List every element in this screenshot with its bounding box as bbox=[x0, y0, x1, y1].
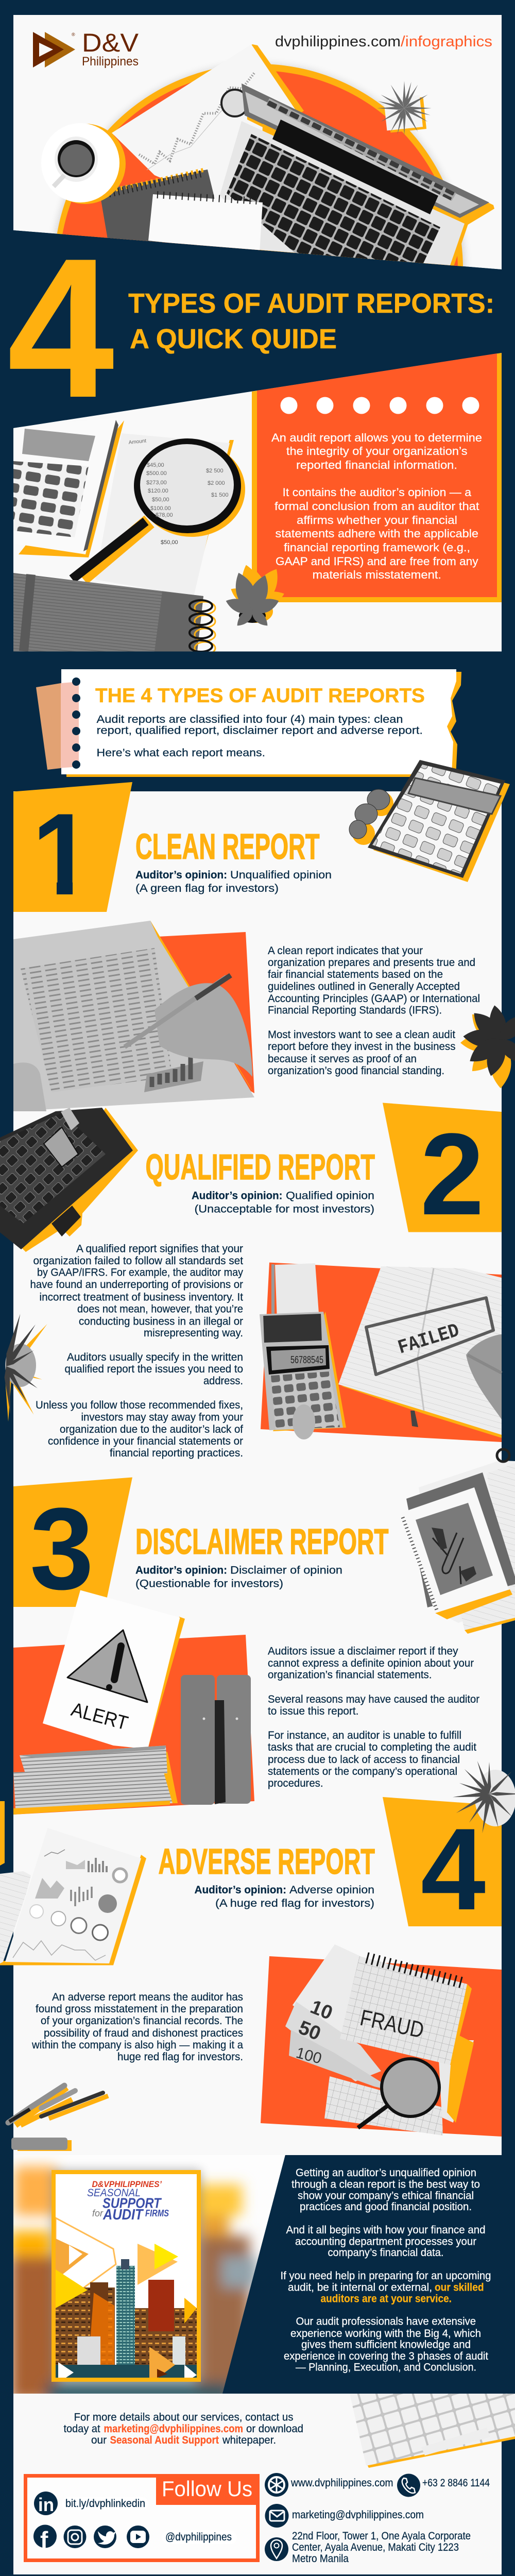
intro text: statements adhere with the applicable bbox=[275, 527, 478, 540]
auditor's opinion bbox=[195, 1884, 374, 1909]
text block: address. bbox=[203, 1375, 243, 1387]
closing text: auditors are at your service. bbox=[320, 2293, 452, 2305]
auditor's opinion bbox=[135, 869, 332, 894]
magnifier bbox=[358, 2059, 439, 2128]
notebook with failed stamp: FAILED bbox=[396, 1320, 462, 1359]
auditor's opinion: Auditor’s opinion: bbox=[192, 1190, 282, 1201]
contact text bbox=[64, 2411, 303, 2446]
big number 4: 4 bbox=[7, 217, 115, 439]
address bbox=[292, 2530, 471, 2565]
intro text: An audit report allows you to determine bbox=[271, 431, 482, 444]
cover title: for bbox=[92, 2208, 104, 2218]
number block 1: 1 bbox=[32, 789, 93, 919]
text block: within the company is also high — making it a bbox=[31, 2039, 243, 2051]
contact text: whitepaper. bbox=[222, 2434, 276, 2446]
icon: pens bbox=[8, 2086, 108, 2125]
fraud note: FRAUD bbox=[358, 2005, 426, 2043]
image: paper, calculator, magnifier and notebook bbox=[13, 418, 245, 654]
closing text: If you need help in preparing for an upcoming bbox=[280, 2270, 491, 2282]
shadow under circle bbox=[53, 62, 468, 267]
website: www.dvphilippines.com bbox=[290, 2477, 393, 2489]
linkedin bbox=[34, 2492, 148, 2515]
text block: by GAAP/IFRS. For example, the auditor may bbox=[37, 1266, 243, 1279]
closing text: audit, be it internal or external, bbox=[288, 2281, 432, 2294]
closing text: And it all begins with how your finance and bbox=[286, 2224, 485, 2236]
tape bbox=[36, 682, 79, 770]
magnifier: $45,00 bbox=[147, 462, 164, 468]
text block: of your organization’s financial records. The bbox=[41, 2015, 243, 2027]
title: TYPES OF AUDIT REPORTS: bbox=[128, 288, 494, 319]
text block: process due to lack of access to financial bbox=[268, 1754, 460, 1766]
cover title: FIRMS bbox=[145, 2208, 169, 2218]
notebook with failed stamp bbox=[338, 1266, 502, 1438]
closing text: Our audit professionals have extensive bbox=[296, 2315, 476, 2328]
closing text: show your company’s ethical financial bbox=[298, 2190, 474, 2202]
auditor's opinion: Auditor’s opinion: bbox=[135, 869, 227, 881]
closing text: — Planning, Execution, and Conclusion. bbox=[296, 2362, 476, 2373]
text block: Auditors usually specify in the written bbox=[67, 1351, 243, 1363]
lower pad bbox=[324, 2032, 474, 2136]
icon: instagram bbox=[64, 2526, 87, 2548]
follow us box bbox=[26, 2474, 260, 2561]
contact text: Seasonal Audit Support bbox=[110, 2434, 219, 2446]
closing text: through a clean report is the best way to bbox=[291, 2178, 480, 2191]
magnifier: $1 500 bbox=[211, 492, 229, 498]
magnifier: $50,00 bbox=[152, 497, 169, 503]
text block bbox=[31, 1991, 243, 2063]
text block: fair financial statements based on the bbox=[268, 969, 443, 980]
image: calculator and failed stamp bbox=[260, 1262, 502, 1442]
intro text bbox=[271, 431, 482, 581]
text block: An adverse report means the auditor has bbox=[52, 1991, 243, 2003]
paper sheet: Amount bbox=[128, 438, 147, 446]
text block: found gross misstatement in the preparation bbox=[36, 2003, 243, 2015]
text block: statements or the company’s operational bbox=[268, 1766, 457, 1777]
text block: Auditors issue a disclaimer report if they bbox=[268, 1646, 458, 1657]
cover artwork bbox=[56, 2218, 197, 2383]
intro text: materials misstatement. bbox=[312, 568, 441, 581]
notebook and notepad bbox=[99, 170, 263, 252]
auditor's opinion: (Questionable for investors) bbox=[135, 1578, 283, 1590]
plant in pot bbox=[377, 81, 432, 135]
text block: Most investors want to see a clean audit bbox=[268, 1029, 455, 1041]
website url: dvphilippines.com bbox=[275, 33, 401, 50]
address: 22nd Floor, Tower 1, One Ayala Corporate bbox=[292, 2530, 471, 2542]
image: printed charts page bbox=[0, 1828, 146, 1965]
icon: mail bbox=[265, 2504, 288, 2528]
auditor's opinion bbox=[135, 1564, 342, 1590]
website url bbox=[275, 33, 492, 50]
heading: QUALIFIED REPORT bbox=[145, 1147, 375, 1187]
icon: youtube bbox=[127, 2526, 149, 2548]
icon: phone bbox=[397, 2474, 420, 2497]
euro bills: 50 bbox=[296, 2016, 324, 2045]
contact text: For more details about our services, contact us bbox=[74, 2411, 294, 2424]
panel: white report body bbox=[13, 791, 502, 2155]
icon: aloe plant bbox=[3, 1313, 50, 1421]
auditor's opinion: (Unacceptable for most investors) bbox=[195, 1204, 374, 1215]
magnifier: $273,00 bbox=[146, 480, 167, 486]
icon: succulent bbox=[460, 1004, 515, 1088]
intro text: GAAP and IFRS) and are free from any bbox=[276, 555, 478, 568]
magnifier bbox=[72, 438, 245, 579]
closing text bbox=[280, 2167, 491, 2373]
alert page: ALERT bbox=[69, 1699, 130, 1735]
text block: report, qualified report, disclaimer report and adverse report. bbox=[97, 724, 423, 737]
text block: organization’s good financial standing. bbox=[268, 1065, 444, 1077]
binder rings bbox=[72, 677, 80, 769]
number block 3: 3 bbox=[30, 1483, 94, 1614]
text block: organization due to the auditor’s lack of bbox=[60, 1423, 243, 1435]
logo bbox=[33, 28, 139, 69]
panel: closing image and text bbox=[13, 2155, 490, 2394]
laptop bbox=[220, 83, 494, 273]
logo wordmark: D&V bbox=[82, 28, 139, 57]
text block: tasks that are crucial to completing the audit bbox=[268, 1741, 476, 1753]
number block 3 bbox=[13, 1478, 132, 1614]
text block: possibility of fraud and dishonest practices bbox=[44, 2027, 243, 2039]
number block 1 bbox=[13, 782, 132, 919]
contact text: marketing@dvphilippines.com bbox=[104, 2423, 243, 2435]
note paper with torn edge bbox=[61, 669, 461, 777]
heading: DISCLAIMER REPORT bbox=[135, 1521, 388, 1562]
panel: hero header bbox=[13, 15, 502, 269]
magnifier: $78,00 bbox=[156, 512, 173, 518]
closing text: practices and good financial position. bbox=[300, 2201, 472, 2213]
icon: calculator and coins bbox=[349, 760, 510, 882]
text block: does not mean, however, that you’re bbox=[77, 1303, 243, 1315]
text block: organization’s financial statements. bbox=[268, 1669, 432, 1681]
auditor's opinion: Qualified opinion bbox=[286, 1190, 374, 1201]
text block: report before they invest in the business bbox=[268, 1041, 455, 1053]
auditor's opinion: (A green flag for investors) bbox=[135, 883, 279, 894]
panel: report 3 disclaimer bbox=[13, 1449, 515, 1815]
euro bills: 100 bbox=[294, 2044, 323, 2067]
magnifier: $2 000 bbox=[208, 480, 225, 486]
intro text: affirms whether your financial bbox=[297, 514, 457, 527]
orange text box bbox=[252, 353, 502, 602]
panel: report 4 adverse bbox=[0, 1760, 515, 2151]
icon: keyboard bbox=[350, 2394, 515, 2468]
file stacks bbox=[13, 1745, 178, 1815]
icon: calculator in dark wallet bbox=[0, 1108, 138, 1252]
text block: Several reasons may have caused the auditor bbox=[268, 1693, 479, 1705]
text block: Unless you follow those recommended fixes, bbox=[36, 1399, 243, 1411]
navy text panel bbox=[222, 2155, 515, 2394]
heading: CLEAN REPORT bbox=[135, 826, 319, 867]
panel: intro bbox=[13, 353, 502, 654]
email: marketing@dvphilippines.com bbox=[292, 2509, 424, 2521]
text block bbox=[97, 714, 423, 759]
website url: /infographics bbox=[401, 33, 492, 50]
auditor's opinion: Disclaimer of opinion bbox=[230, 1564, 342, 1577]
dots bbox=[280, 397, 479, 414]
auditor's opinion: (A huge red flag for investors) bbox=[215, 1897, 374, 1909]
text block: have found an underreporting of provisions or bbox=[30, 1279, 243, 1291]
auditor's opinion: Auditor’s opinion: bbox=[195, 1884, 286, 1896]
text block: Here’s what each report means. bbox=[97, 747, 265, 759]
wooden notebook bbox=[13, 573, 215, 654]
text block: guidelines outlined in Generally Accepted bbox=[268, 981, 460, 992]
contact text: or download bbox=[246, 2423, 303, 2435]
icon: facebook: f bbox=[40, 2527, 48, 2553]
auditor's opinion: Auditor’s opinion: bbox=[135, 1564, 227, 1577]
image: alert sign, files and binders bbox=[13, 1590, 254, 1815]
text block bbox=[30, 1243, 243, 1459]
cover title: AUDIT bbox=[102, 2207, 144, 2223]
text block: organization failed to follow all standards set bbox=[33, 1255, 243, 1267]
icon: globe bbox=[265, 2473, 288, 2497]
cover title: SUPPORT bbox=[102, 2195, 162, 2211]
text block: because it serves as proof of an bbox=[268, 1053, 417, 1065]
linkedin: in bbox=[38, 2494, 54, 2515]
magnifier: $500.00 bbox=[146, 470, 167, 477]
fraud note bbox=[340, 1956, 472, 2065]
alert page bbox=[43, 1590, 185, 1749]
text block: to issue this report. bbox=[268, 1705, 358, 1717]
text block: investors may stay away from your bbox=[81, 1412, 243, 1423]
magnifier: $100.00 bbox=[150, 505, 171, 512]
heading: ADVERSE REPORT bbox=[159, 1841, 375, 1882]
cover title bbox=[87, 2179, 169, 2223]
euro bills bbox=[285, 1944, 397, 2092]
coffee cup bbox=[52, 124, 126, 204]
icon: facebook bbox=[33, 2524, 57, 2553]
panel: footer bbox=[13, 2394, 515, 2574]
calculator bbox=[13, 418, 124, 557]
logo wordmark: Philippines bbox=[82, 55, 139, 69]
contact text: today at bbox=[64, 2423, 100, 2435]
printing calculator: 56788545 bbox=[290, 1354, 323, 1366]
icon: mint plant bbox=[224, 563, 286, 629]
intro text: the integrity of your organization’s bbox=[286, 445, 468, 457]
intro text: reported financial information. bbox=[296, 459, 457, 471]
text block: Accounting Principles (GAAP) or International bbox=[268, 993, 480, 1005]
chart paper bbox=[112, 44, 304, 206]
closing text: Getting an auditor’s unqualified opinion bbox=[296, 2167, 476, 2179]
number block 4: 4 bbox=[421, 1804, 486, 1934]
text block: confidence in your financial statements or bbox=[48, 1435, 243, 1447]
title bbox=[128, 288, 494, 354]
text block: A qualified report signifies that your bbox=[76, 1243, 243, 1255]
closing text: our skilled bbox=[435, 2281, 484, 2294]
whitepaper cover bbox=[52, 2170, 201, 2383]
auditor's opinion: Adverse opinion bbox=[289, 1884, 374, 1896]
text block bbox=[268, 1646, 479, 1789]
address: Center, Ayala Avenue, Makati City 1223 bbox=[292, 2541, 459, 2553]
magnifier behind laptop bbox=[221, 90, 248, 116]
auditor's opinion: Unqualified opinion bbox=[230, 869, 332, 881]
number block 2 bbox=[383, 1103, 502, 1239]
text block: financial reporting practices. bbox=[110, 1447, 243, 1459]
printing calculator bbox=[260, 1263, 346, 1439]
panel: report 2 qualified bbox=[0, 1103, 502, 1459]
text block: huge red flag for investors. bbox=[117, 2051, 243, 2063]
icon: spiky plant bbox=[453, 1760, 515, 1834]
magnifier: $2 500 bbox=[206, 468, 224, 474]
follow us tab: Follow Us bbox=[162, 2477, 252, 2501]
paper sheet: $50,00 bbox=[161, 539, 178, 546]
auditor's opinion bbox=[192, 1190, 374, 1215]
paper sheet bbox=[95, 433, 234, 597]
intro text: financial reporting framework (e.g., bbox=[284, 541, 470, 554]
icon: logo arrows bbox=[33, 32, 75, 67]
number block 2: 2 bbox=[420, 1109, 484, 1239]
icon: twitter bbox=[94, 2526, 116, 2548]
text block: organization prepares and presents true and bbox=[268, 957, 475, 969]
text block: qualified report the issues you need to bbox=[65, 1363, 243, 1375]
phone number: +63 2 8846 1144 bbox=[422, 2477, 490, 2489]
text block: For instance, an auditor is unable to fulfill bbox=[268, 1730, 461, 1741]
text block: Audit reports are classified into four (4) main types: clean bbox=[97, 714, 403, 725]
icon: marker bbox=[11, 2138, 72, 2151]
logo wordmark: ® bbox=[72, 32, 75, 37]
address: Metro Manila bbox=[292, 2553, 349, 2565]
closing text: company’s financial data. bbox=[328, 2247, 444, 2259]
binders bbox=[181, 1675, 251, 1805]
heading: THE 4 TYPES OF AUDIT REPORTS bbox=[95, 685, 425, 707]
text block bbox=[268, 945, 480, 1077]
accent on left edge bbox=[0, 1801, 5, 1866]
number block 4 bbox=[383, 1797, 502, 1934]
closing text: accounting department processes your bbox=[295, 2236, 476, 2247]
text block: procedures. bbox=[268, 1777, 323, 1789]
text block: Financial Reporting Standards (IFRS). bbox=[268, 1005, 442, 1016]
yellow and orange circle bbox=[57, 64, 463, 266]
cover title: D&VPHILIPPINES’ bbox=[92, 2179, 162, 2189]
text block: conducting business in an illegal or bbox=[79, 1316, 243, 1327]
closing text: gives them sufficient knowledge and bbox=[301, 2339, 471, 2350]
closing text: experience in covering the 3 phases of audit bbox=[284, 2350, 488, 2362]
panel: report 1 clean bbox=[13, 760, 515, 1111]
logo wordmark bbox=[72, 28, 139, 69]
social handle: @dvphilippines bbox=[165, 2531, 232, 2543]
text block: incorrect treatment of business inventory. It bbox=[39, 1291, 243, 1303]
linkedin: bit.ly/dvphlinkedin bbox=[65, 2498, 145, 2510]
image: report with hand and pen bbox=[13, 921, 254, 1111]
magnifier: $120.00 bbox=[148, 488, 168, 494]
blurred city background bbox=[10, 2155, 285, 2406]
text block: A clean report indicates that your bbox=[268, 945, 423, 957]
closing text: experience working with the Big 4, which bbox=[290, 2328, 481, 2340]
intro text: formal conclusion from an auditor that bbox=[274, 500, 479, 513]
contact text: our bbox=[91, 2434, 107, 2446]
image: clipboard with notebook bbox=[401, 1449, 515, 1634]
contact details bbox=[265, 2473, 490, 2565]
text block: misrepresenting way. bbox=[144, 1327, 243, 1339]
title: A QUICK QUIDE bbox=[130, 324, 337, 354]
panel: the 4 types bbox=[36, 669, 461, 777]
euro bills: 10 bbox=[307, 1996, 336, 2024]
intro text: It contains the auditor’s opinion — a bbox=[282, 486, 472, 499]
icon: location pin bbox=[265, 2537, 288, 2561]
text block: cannot express a definite opinion about your bbox=[268, 1657, 474, 1669]
cover title: SEASONAL bbox=[87, 2187, 141, 2199]
image: fraud note and money bbox=[261, 1944, 502, 2137]
